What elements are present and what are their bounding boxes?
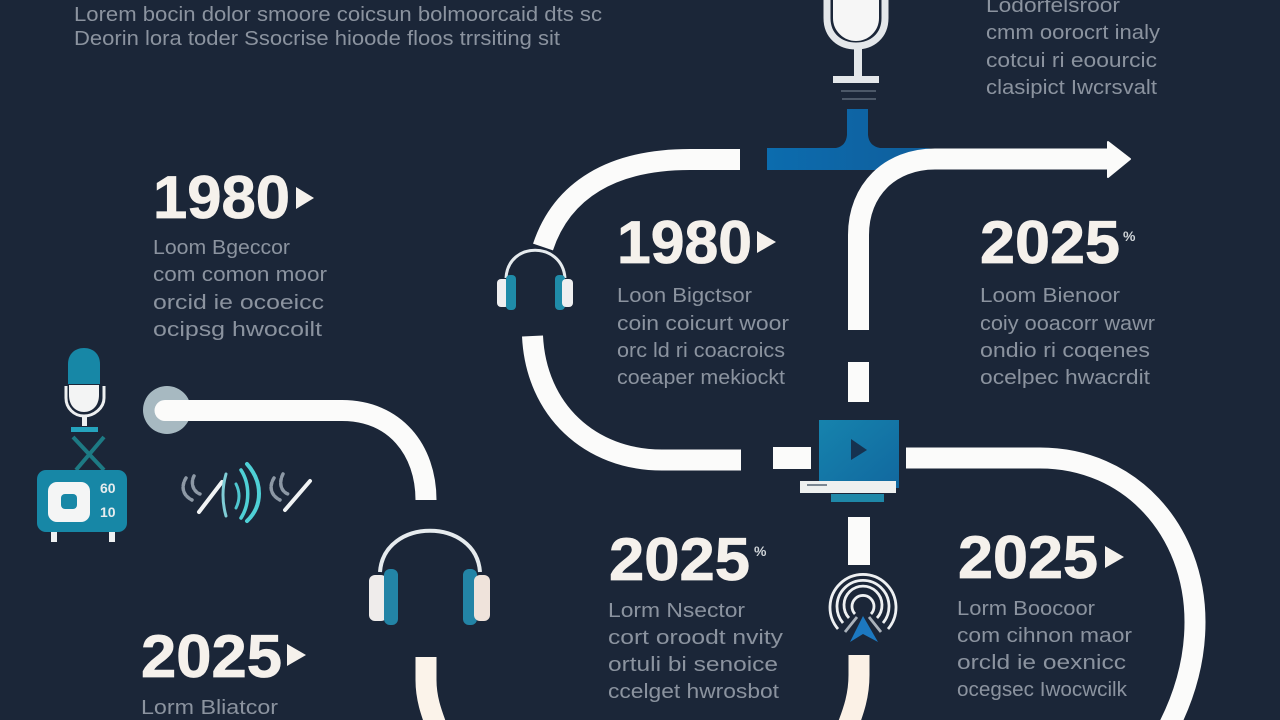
year block: 2025 lower centre: Lorm Nsector — [608, 600, 745, 622]
timeline path: top right arrow — [858, 142, 1130, 330]
year block: 2025 lower centre — [608, 526, 783, 703]
year block: 1980 centre: 1980 — [617, 209, 752, 276]
year block: 2025 lower centre: 2025 — [609, 526, 750, 593]
year block: 1980 centre: orc ld ri coacroics — [617, 340, 785, 362]
intro text: Deorin lora toder Ssocrise hioode floos trrsiting sit — [74, 28, 560, 50]
year block: 1980 left — [153, 164, 327, 341]
year block: 1980 centre: coin coicurt woor — [617, 313, 789, 335]
year block: 2025 upper right: Loom Bienoor — [980, 285, 1120, 307]
icon: left microphone and radio: 60 — [100, 480, 116, 496]
year block: 1980 left: orcid ie ocoeicc — [153, 292, 324, 314]
icon: sound waves — [183, 464, 310, 521]
year block: 1980 left: Loom Bgeccor — [153, 237, 290, 259]
year block: 1980 centre: coeaper mekiockt — [617, 367, 785, 389]
text block: top right: cotcui ri eoourcic — [986, 50, 1157, 72]
intro text: Lorem bocin dolor smoore coicsun bolmoorcaid dts sc — [74, 4, 602, 26]
text block: top right: clasipict Iwcrsvalt — [986, 77, 1157, 99]
year block: 1980 left: com comon moor — [153, 264, 327, 286]
year block: 2025 lower centre: ortuli bi senoice — [608, 654, 778, 676]
year block: 1980 left: 1980 — [153, 164, 290, 231]
year block: 2025 lower right — [957, 524, 1132, 701]
timeline path: centre dash upper — [848, 362, 869, 402]
year block: 1980 centre — [617, 209, 789, 389]
icon: left microphone and radio — [37, 348, 127, 542]
year block: 2025 lower left — [141, 623, 306, 719]
timeline path: bottom left curve — [426, 657, 437, 720]
icon: large headphones — [369, 531, 490, 625]
timeline path: start node and line — [143, 386, 426, 500]
timeline path: centre dash lower — [848, 517, 870, 565]
year block: 1980 centre: Loon Bigctsor — [617, 285, 752, 307]
icon: top microphone — [827, 0, 885, 100]
year block: 2025 lower centre: ccelget hwrosbot — [608, 681, 780, 703]
year block: 2025 lower left: 2025 — [141, 623, 282, 690]
year block: 2025 upper right: ondio ri coqenes — [980, 340, 1150, 362]
text block: top right: cmm oorocrt inaly — [986, 22, 1160, 44]
timeline path: right sweep — [906, 458, 1195, 720]
icon: signal broadcast — [830, 574, 896, 642]
year block: 2025 lower right: orcld ie oexnicc — [957, 652, 1126, 674]
year block: 2025 lower centre: % — [754, 543, 767, 559]
icon: video screen — [800, 420, 899, 502]
year block: 1980 left: ocipsg hwocoilt — [153, 319, 323, 341]
year block: 2025 upper right — [980, 209, 1155, 389]
blue T connector — [767, 109, 931, 170]
timeline path: centre bottom curve — [847, 655, 859, 720]
intro text — [74, 4, 602, 50]
timeline path: upper left arc — [543, 160, 740, 247]
text block: top right — [986, 0, 1160, 99]
year block: 2025 lower right: Lorm Boocoor — [957, 598, 1095, 620]
year block: 2025 lower right: com cihnon maor — [957, 625, 1132, 647]
timeline path: lower left arc — [532, 336, 741, 460]
year block: 2025 lower centre: cort oroodt nvity — [608, 627, 783, 649]
year block: 2025 upper right: 2025 — [980, 209, 1120, 276]
year block: 2025 lower right: ocegsec Iwocwcilk — [957, 679, 1128, 701]
year block: 2025 lower right: 2025 — [958, 524, 1098, 591]
year block: 2025 upper right: coiy ooacorr wawr — [980, 313, 1155, 335]
timeline path: short segment — [773, 447, 811, 469]
year block: 2025 upper right: ocelpec hwacrdit — [980, 367, 1151, 389]
year block: 2025 upper right: % — [1123, 228, 1136, 244]
year block: 2025 lower left: Lorm Bliatcor — [141, 697, 278, 719]
icon: left microphone and radio: 10 — [100, 504, 116, 520]
icon: small headphones — [497, 250, 573, 310]
